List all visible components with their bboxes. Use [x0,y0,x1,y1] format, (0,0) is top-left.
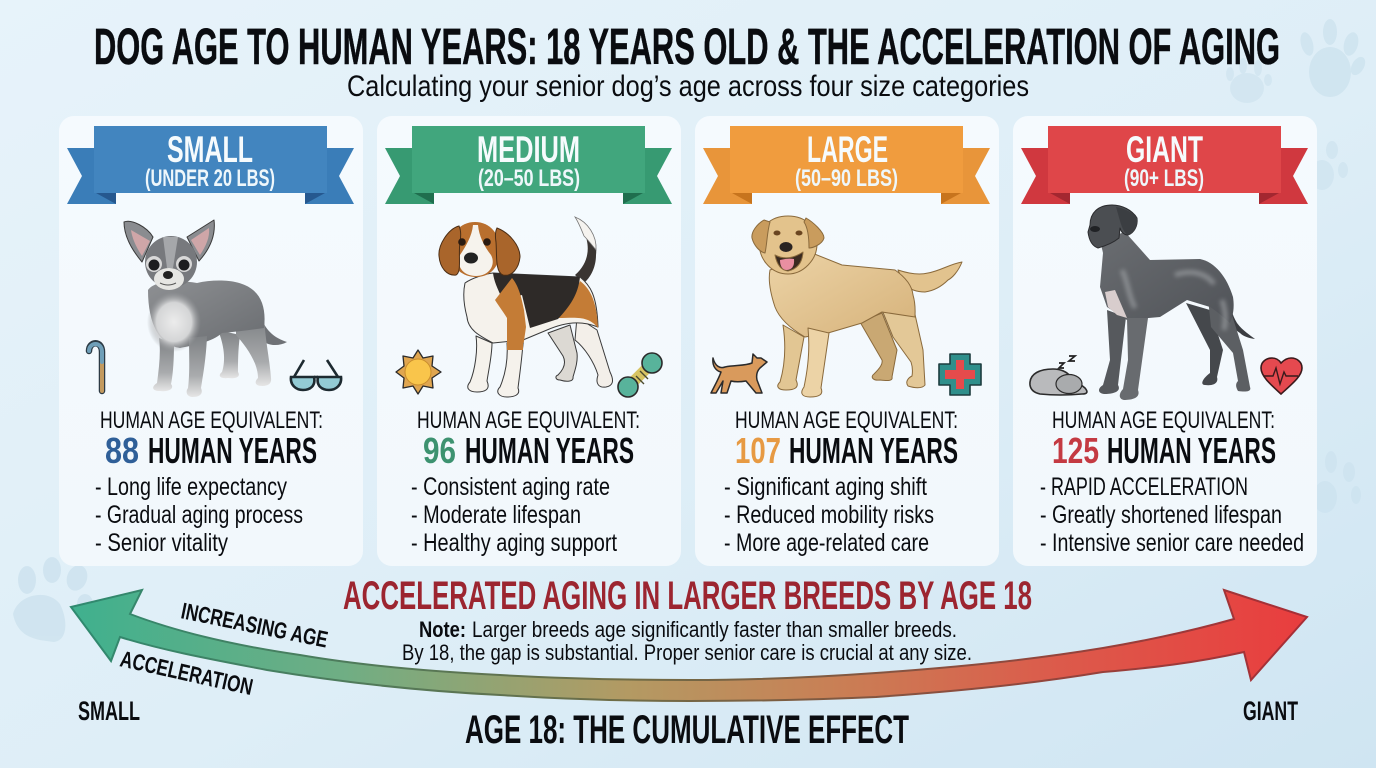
ribbon banner [385,126,672,204]
icon: toy bone [618,353,662,397]
note text: By 18, the gap is substantial. Proper senior care is crucial at any size. [402,640,972,665]
bullet list: - Reduced mobility risks [724,501,934,529]
paw watermark: bottom left [13,557,93,642]
weight range: (50–90 LBS) [795,165,898,192]
human years value [423,430,634,471]
dog illustration: labrador [752,216,962,397]
heading: LARGE [807,129,888,170]
curve label: increasing age: INCREASING AGE [179,597,330,653]
weight range: (90+ LBS) [1124,165,1204,192]
acceleration arrow [71,590,1307,701]
bullet list [724,473,934,557]
bullet list: - Greatly shortened lifespan [1040,501,1282,529]
weight range: (UNDER 20 LBS) [145,165,275,192]
icon: small walking dog [711,354,767,393]
human years value: HUMAN YEARS [148,430,317,471]
panel: giant [1013,116,1317,566]
paw watermark: top right large [1298,19,1368,97]
human years value: 96 [423,430,456,471]
curve label: acceleration: ACCELERATION [118,645,255,700]
icon: medical cross [939,354,981,395]
human age label: HUMAN AGE EQUIVALENT: [417,407,640,434]
bullet list [1040,473,1304,557]
human years value: HUMAN YEARS [465,430,634,471]
human age label: HUMAN AGE EQUIVALENT: [1052,407,1275,434]
human age label: HUMAN AGE EQUIVALENT: [735,407,958,434]
note text: Note: [419,617,466,642]
ribbon banner [67,126,354,204]
bullet list: - Moderate lifespan [411,501,581,529]
human years value: 88 [105,430,139,471]
bullet list: - RAPID ACCELERATION [1040,473,1248,501]
bullet list [411,473,617,557]
ribbon banner [1021,126,1308,204]
bullet list: - Intensive senior care needed [1040,529,1304,557]
bullet list: - More age-related care [724,529,929,557]
footer caption: AGE 18: THE CUMULATIVE EFFECT [465,708,909,752]
subtitle: Calculating your senior dog’s age across four size categories [347,70,1029,103]
bullet list: - Long life expectancy [95,473,287,501]
panel: small [59,116,363,566]
card background [1013,116,1317,566]
dog illustration: beagle [439,217,613,397]
icon: cane [89,343,102,391]
bullet list: - Senior vitality [95,529,228,557]
weight range: (20–50 LBS) [478,165,580,192]
human years value [105,430,317,471]
human years value [735,430,958,471]
human years value: 125 [1052,430,1099,471]
icon: glasses [291,360,341,390]
icon: heart with pulse [1261,358,1302,394]
paw watermark: top right small [1226,58,1272,103]
human years value: HUMAN YEARS [1107,430,1276,471]
ribbon banner [703,126,990,204]
card background [377,116,681,566]
heading: SMALL [167,129,253,170]
bullet list: - Significant aging shift [724,473,927,501]
icon: sun [396,350,441,394]
paw watermark: right lower [1313,451,1361,513]
bullet list: - Consistent aging rate [411,473,610,501]
card background [59,116,363,566]
paw watermark: right middle [1310,141,1348,190]
bullet list: - Healthy aging support [411,529,617,557]
card background [695,116,999,566]
note text [402,617,972,665]
panel: medium [377,116,681,566]
human years value: HUMAN YEARS [789,430,958,471]
bullet list [95,473,303,557]
human years value: 107 [735,430,781,471]
axis label: giant: GIANT [1243,696,1298,726]
panel: large [695,116,999,566]
bullet list: - Gradual aging process [95,501,303,529]
heading: MEDIUM [477,129,580,170]
human years value [1052,430,1276,471]
human age label: HUMAN AGE EQUIVALENT: [100,407,323,434]
icon: sleeping dog [1030,356,1087,395]
heading: GIANT [1126,129,1203,170]
note text: Larger breeds age significantly faster than smaller breeds. [472,617,957,642]
dog illustration: great dane [1088,205,1255,400]
axis label: small: SMALL [78,696,140,726]
dog illustration: chihuahua [124,220,287,397]
